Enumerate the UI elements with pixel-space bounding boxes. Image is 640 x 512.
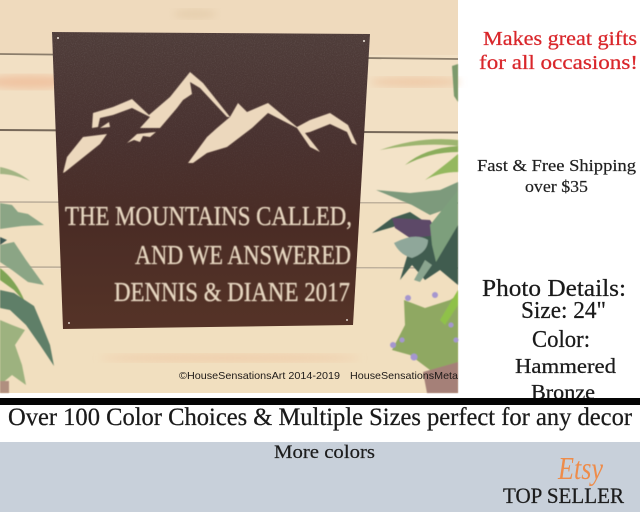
sidebar: photo details: Hammered xyxy=(515,354,617,378)
photo watermark text xyxy=(179,371,458,382)
sidebar: shipping note: Fast & Free Shipping xyxy=(477,156,637,175)
top seller label: TOP SELLER xyxy=(503,483,624,508)
plant: left fern xyxy=(0,167,54,393)
sign text: lettering xyxy=(65,201,352,307)
sidebar: gifts callout xyxy=(479,28,638,74)
sidebar: gifts callout: for all occasions! xyxy=(479,52,638,74)
icon: mounting screw holes xyxy=(57,37,365,324)
footer band xyxy=(0,442,640,512)
mountain silhouette cut-out xyxy=(63,72,357,173)
sidebar: photo details xyxy=(482,276,626,404)
sign text: lettering: AND WE ANSWERED xyxy=(135,240,351,270)
sidebar: shipping note: over $35 xyxy=(525,177,588,196)
sidebar: gifts callout: Makes great gifts xyxy=(483,28,637,50)
sidebar: photo details: Photo Details: xyxy=(482,276,626,302)
divider bar xyxy=(0,398,640,405)
sidebar: shipping note xyxy=(477,156,637,196)
headline: color choices: Over 100 Color Choices & Multiple Sizes perfect for any decor xyxy=(8,404,633,431)
more colors label: More colors xyxy=(274,442,375,463)
metal sign panel xyxy=(52,32,370,329)
sidebar: photo details: Color: xyxy=(532,327,590,353)
sidebar: photo details: Size: 24" xyxy=(521,298,606,324)
sidebar: photo details: Bronze xyxy=(531,380,595,404)
photo: wooden plank background xyxy=(0,0,460,393)
Etsy script label: Etsy xyxy=(557,450,604,486)
photo watermark text: HouseSensationsMeta xyxy=(350,371,458,382)
plant: right foliage and flowers xyxy=(372,64,458,393)
photo watermark text: ©HouseSensationsArt 2014-2019 xyxy=(179,371,340,382)
sign text: lettering: THE MOUNTAINS CALLED, xyxy=(65,201,352,231)
sign text: lettering: DENNIS & DIANE 2017 xyxy=(114,277,350,307)
